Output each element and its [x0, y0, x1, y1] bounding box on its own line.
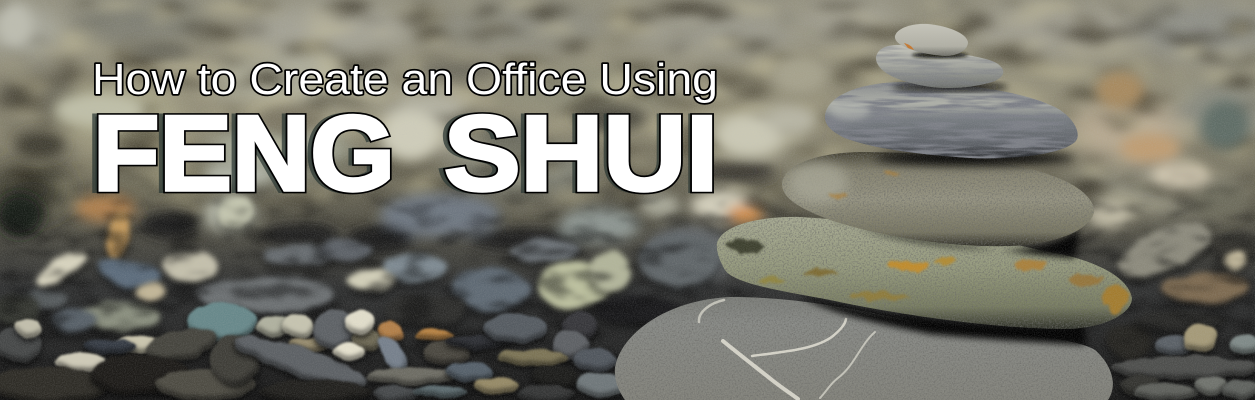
- stone 3: blue-grey striped stone: [825, 82, 1078, 158]
- near out-of-focus pebbles: [0, 196, 1255, 358]
- title shadow: FENG SHUI: FENG: [88, 93, 391, 213]
- stone stack: [615, 24, 1132, 400]
- stone 3 contact shadow: [875, 151, 1075, 165]
- stone 1: small top pebble: [895, 24, 968, 56]
- title main: FENG SHUI: FENG: [93, 93, 395, 213]
- lichen patches: [725, 239, 1127, 312]
- title outline: FENG SHUI: [93, 93, 718, 213]
- stone 6: bottom boulder with white veins: [615, 297, 1113, 400]
- dark gaps between lower pebbles: [0, 169, 1255, 367]
- title shadow: FENG SHUI: SHUI: [439, 93, 716, 213]
- mottled dark patches: [0, 0, 1255, 214]
- title main: FENG SHUI: SHUI: [444, 93, 718, 213]
- title outline: FENG SHUI: FENG: [93, 93, 395, 213]
- stone 4: rounded tan stone: [782, 152, 1094, 246]
- mid bokeh pebbles: [0, 3, 1250, 285]
- stone 5: mossy stone with orange lichen: [717, 217, 1132, 329]
- stone 4 contact shadow on mossy stone: [830, 218, 1080, 258]
- in-focus foreground pebbles: [0, 302, 1255, 400]
- stone 2: pale flat stone: [876, 45, 1003, 88]
- far bokeh pebbles: [0, 0, 1255, 216]
- title outline: FENG SHUI: SHUI: [444, 93, 718, 213]
- title shadow: FENG SHUI: [88, 93, 716, 213]
- title line: How to Create an Office Using: How to Create an Office Using: [92, 55, 718, 104]
- mottled light patches: [2, 0, 1255, 230]
- title main: FENG SHUI: [93, 93, 718, 213]
- stone 2 contact shadow: [892, 83, 1008, 91]
- stone 5 contact shadow on boulder: [800, 295, 1085, 345]
- stone 1 contact shadow: [912, 52, 968, 58]
- title: [88, 55, 718, 213]
